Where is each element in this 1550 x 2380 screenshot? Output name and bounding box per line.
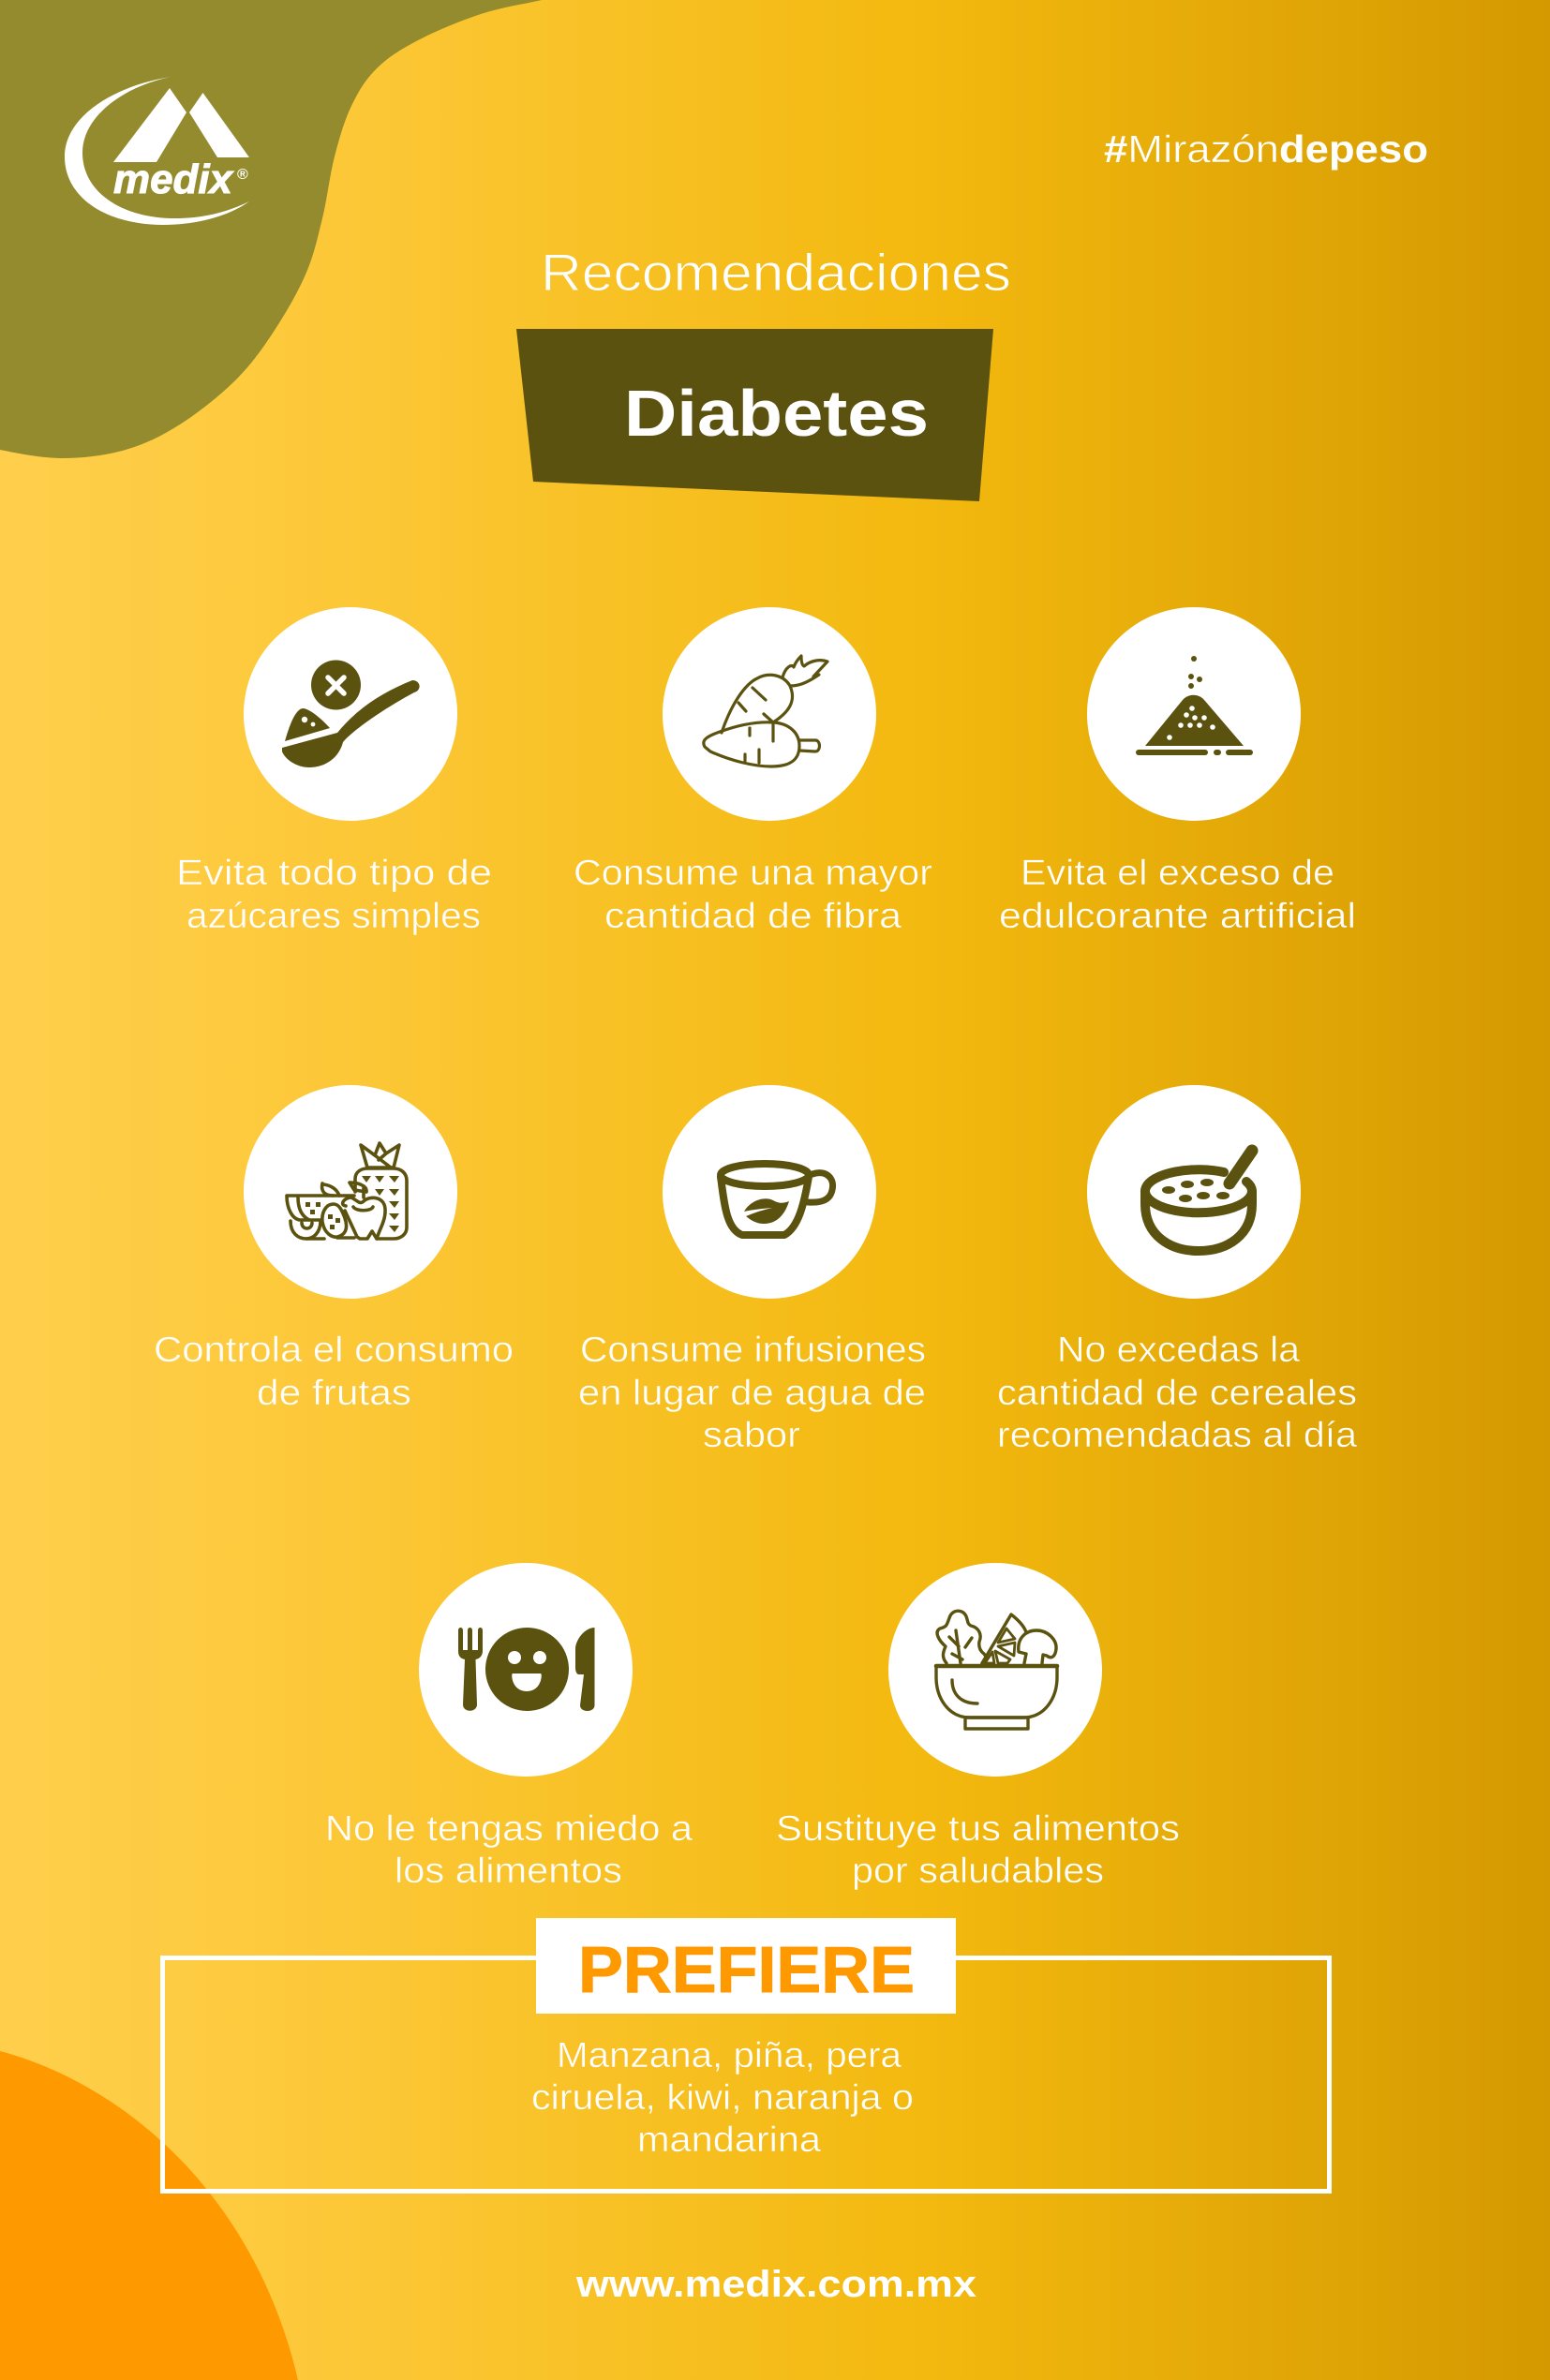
icon: salad bowl	[936, 1611, 1057, 1729]
text	[574, 854, 932, 936]
text: cantidad de fibra	[604, 897, 902, 936]
label box: PREFIERE	[536, 1918, 956, 2014]
text: mandarina	[637, 2120, 822, 2160]
panel: fibra	[574, 607, 932, 936]
panel: cereales	[997, 1085, 1358, 1455]
logo: medix: medix	[113, 156, 234, 202]
logo: medix	[65, 77, 249, 225]
text: los alimentos	[395, 1852, 622, 1891]
text: Evita el exceso de	[1021, 854, 1334, 893]
title banner: Diabetes: Diabetes	[624, 377, 929, 450]
text: recomendadas al día	[997, 1416, 1358, 1455]
text: Sustituye tus alimentos	[776, 1809, 1180, 1849]
icon: cereal bowl	[1145, 1151, 1252, 1251]
text	[578, 1331, 926, 1455]
text: edulcorante artificial	[999, 897, 1356, 936]
title banner: Diabetes	[516, 329, 993, 501]
top-left olive blob	[0, 0, 542, 458]
bottom-left orange shape	[0, 2051, 298, 2380]
text: No le tengas miedo a	[325, 1809, 693, 1849]
panel: frutas	[154, 1085, 514, 1413]
text: de frutas	[257, 1374, 411, 1413]
text	[154, 1331, 514, 1413]
hashtag: #Mirazón depeso	[1104, 127, 1428, 171]
website: www.medix.com.mx	[575, 2264, 976, 2305]
panel: infusiones	[578, 1085, 926, 1455]
text: Manzana, piña, pera	[557, 2036, 902, 2075]
panel: azúcares	[176, 607, 492, 936]
text	[999, 854, 1356, 936]
panel: alimentos	[325, 1563, 693, 1891]
label box: PREFIERE: PREFIERE	[578, 1933, 915, 2006]
panel: saludables	[776, 1563, 1180, 1891]
text	[776, 1809, 1180, 1891]
text: por saludables	[852, 1852, 1104, 1891]
text: cantidad de cereales	[997, 1374, 1357, 1413]
text: No excedas la	[1057, 1331, 1301, 1370]
heading: Recomendaciones: Recomendaciones	[541, 243, 1011, 302]
icon: spoon with sugar	[282, 660, 420, 767]
text: en lugar de agua de	[578, 1374, 926, 1413]
text: azúcares simples	[186, 897, 481, 936]
text	[531, 2036, 914, 2160]
text: Consume una mayor	[574, 854, 932, 893]
icon: fruits	[287, 1143, 407, 1239]
icon: carrots	[704, 656, 827, 766]
icon: plate with smile, fork and knife	[458, 1628, 594, 1711]
icon: tea cup	[721, 1164, 833, 1235]
text: Controla el consumo	[154, 1331, 514, 1370]
text: sabor	[703, 1416, 800, 1455]
panel: prefiere	[163, 1918, 1329, 2191]
text	[176, 854, 492, 936]
text	[325, 1809, 693, 1891]
text: ciruela, kiwi, naranja o	[531, 2078, 914, 2118]
logo: medix: ®	[237, 167, 248, 183]
text	[997, 1331, 1358, 1455]
text: Consume infusiones	[580, 1331, 926, 1370]
icon: sweetener pile	[1136, 656, 1253, 755]
panel: edulcorante	[999, 607, 1356, 936]
text: Evita todo tipo de	[176, 854, 492, 893]
